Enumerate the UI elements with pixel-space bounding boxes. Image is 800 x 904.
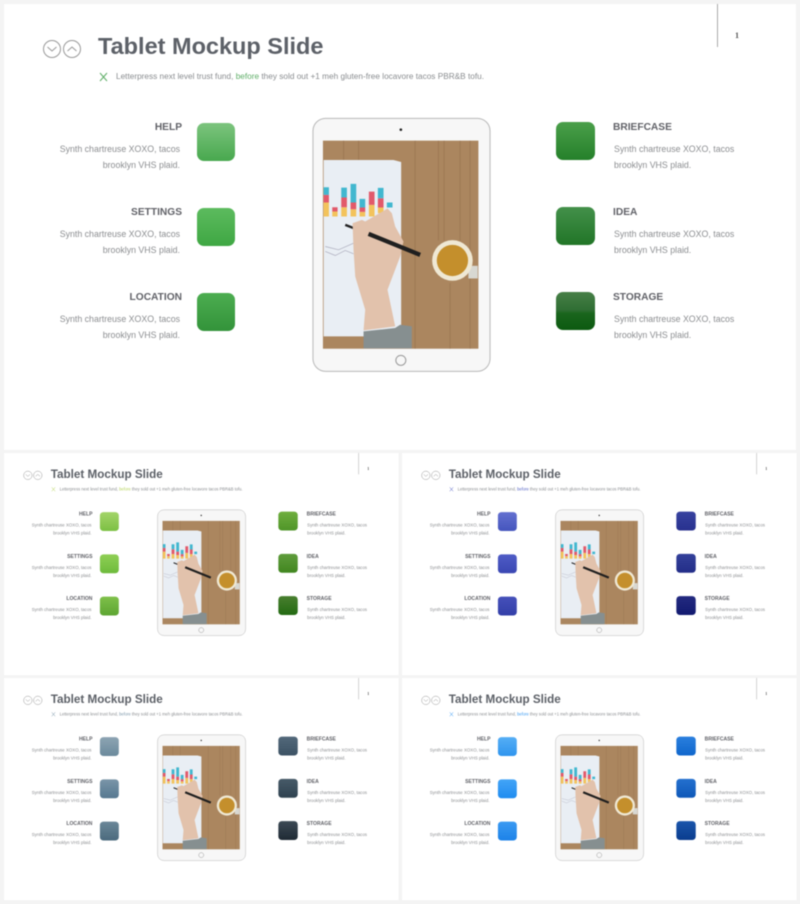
item: storage: brooklyn VHS plaid. [307, 840, 346, 845]
item: help: Synth chartreuse XOXO, tacos [430, 748, 489, 753]
page number: 1 [765, 691, 767, 696]
icon: idea square [278, 554, 298, 573]
icon: storage square [676, 596, 696, 615]
item: location [371, 820, 490, 848]
item: briefcase [306, 510, 368, 536]
item: location [60, 292, 182, 340]
item: location: brooklyn VHS plaid. [103, 330, 180, 340]
item: location: LOCATION [464, 596, 490, 602]
icon: storage square [556, 292, 595, 330]
item: storage: brooklyn VHS plaid. [307, 615, 346, 620]
item: settings [32, 553, 93, 578]
icon: location square [498, 822, 517, 841]
panel: main green slide [4, 4, 796, 450]
item: idea: IDEA [307, 554, 319, 559]
item: storage: STORAGE [613, 292, 663, 303]
panel: lime slide [4, 453, 399, 675]
icon: chevron circles [22, 470, 43, 480]
tablet mockup [156, 734, 246, 862]
item: location: brooklyn VHS plaid. [53, 840, 91, 845]
item: briefcase: BRIEFCASE [705, 737, 734, 742]
item: settings: brooklyn VHS plaid. [53, 573, 91, 578]
item: help: Synth chartreuse XOXO, tacos [60, 144, 180, 154]
item: location: LOCATION [130, 292, 182, 303]
item: storage: Synth chartreuse XOXO, tacos [705, 607, 765, 612]
item: help: Synth chartreuse XOXO, tacos [430, 523, 489, 528]
item: help: HELP [477, 737, 490, 742]
icon: chevron circles [420, 470, 441, 480]
item: help: brooklyn VHS plaid. [53, 530, 91, 535]
item: briefcase: brooklyn VHS plaid. [705, 530, 744, 535]
item: settings: Synth chartreuse XOXO, tacos [32, 565, 91, 570]
icon: settings square [100, 554, 119, 573]
item: briefcase: BRIEFCASE [613, 122, 672, 133]
item: idea [306, 553, 368, 578]
item: help: HELP [79, 737, 92, 742]
item: location: Synth chartreuse XOXO, tacos [32, 607, 91, 612]
tablet mockup [312, 117, 491, 372]
icon: briefcase square [278, 737, 298, 756]
item: storage [705, 820, 800, 848]
page divider [357, 678, 360, 699]
icon: location square [100, 822, 119, 841]
icon: help square [100, 512, 119, 531]
item: settings: brooklyn VHS plaid. [53, 798, 91, 803]
item: briefcase: BRIEFCASE [705, 512, 734, 517]
panel: indigo slide [402, 453, 797, 675]
item: storage: Synth chartreuse XOXO, tacos [307, 832, 367, 837]
item: storage: STORAGE [307, 596, 332, 602]
icon: idea square [278, 779, 298, 798]
item: idea: IDEA [705, 779, 717, 784]
icon: storage square [278, 596, 298, 615]
item: location: Synth chartreuse XOXO, tacos [60, 314, 180, 324]
item: settings: SETTINGS [131, 207, 182, 218]
item: idea: Synth chartreuse XOXO, tacos [614, 229, 734, 239]
item: briefcase: BRIEFCASE [307, 737, 336, 742]
item: location: Synth chartreuse XOXO, tacos [32, 832, 91, 837]
item: location: brooklyn VHS plaid. [451, 615, 489, 620]
item: briefcase [704, 510, 766, 536]
item: help [32, 736, 93, 761]
item: settings: Synth chartreuse XOXO, tacos [32, 790, 91, 795]
item: help [430, 510, 491, 536]
item: help: brooklyn VHS plaid. [53, 755, 91, 760]
item: help: HELP [79, 512, 92, 517]
icon: location square [498, 597, 517, 616]
page divider [717, 4, 718, 47]
item: idea: brooklyn VHS plaid. [307, 573, 346, 578]
item: help: brooklyn VHS plaid. [451, 755, 489, 760]
item: settings [60, 207, 182, 256]
item: help [32, 510, 93, 536]
subtitle: Letterpress next level trust fund, before they sold out +1 meh gluten-free locavore tacos PBR&B tofu. [458, 712, 641, 716]
item: storage: brooklyn VHS plaid. [705, 615, 744, 620]
item: briefcase: Synth chartreuse XOXO, tacos [614, 144, 734, 154]
panel: slate slide [4, 678, 399, 900]
subtitle: Letterpress next level trust fund, before they sold out +1 meh gluten-free locavore tacos PBR&B tofu. [60, 487, 243, 491]
item: briefcase [705, 736, 800, 763]
icon: settings square [498, 554, 517, 573]
subtitle: Letterpress next level trust fund, before they sold out +1 meh gluten-free locavore tacos PBR&B tofu. [60, 712, 243, 716]
icon: briefcase square [676, 737, 696, 756]
subtitle: Letterpress next level trust fund, before they sold out +1 meh gluten-free locavore tacos PBR&B tofu. [458, 487, 641, 491]
icon: help square [498, 737, 517, 756]
icon: idea square [676, 554, 696, 573]
item: idea: Synth chartreuse XOXO, tacos [705, 790, 765, 795]
icon: briefcase square [556, 122, 595, 160]
item: idea: Synth chartreuse XOXO, tacos [307, 790, 367, 795]
title: Tablet Mockup Slide [98, 33, 323, 59]
item: location: LOCATION [66, 821, 92, 827]
item: storage [612, 292, 734, 340]
item: briefcase: brooklyn VHS plaid. [307, 755, 346, 760]
item: idea: brooklyn VHS plaid. [705, 573, 744, 578]
item: storage: brooklyn VHS plaid. [614, 330, 691, 340]
icon: chevron circles [42, 40, 82, 58]
item: idea: Synth chartreuse XOXO, tacos [307, 565, 367, 570]
item: location: Synth chartreuse XOXO, tacos [430, 607, 489, 612]
icon: settings square [197, 208, 235, 246]
item: help: brooklyn VHS plaid. [103, 160, 180, 170]
icon: cross mark [449, 486, 454, 492]
item: storage: STORAGE [307, 821, 332, 827]
item: help: HELP [477, 512, 490, 517]
item: idea: IDEA [705, 554, 717, 559]
item: settings: brooklyn VHS plaid. [103, 245, 180, 255]
item: settings: Synth chartreuse XOXO, tacos [60, 229, 180, 239]
page divider [755, 678, 758, 699]
item: settings: SETTINGS [465, 779, 490, 784]
item: settings: SETTINGS [67, 554, 92, 559]
icon: chevron circles [421, 695, 441, 705]
item: idea [704, 553, 766, 578]
item: briefcase: Synth chartreuse XOXO, tacos [307, 748, 367, 753]
item: help: brooklyn VHS plaid. [451, 530, 489, 535]
item: storage: Synth chartreuse XOXO, tacos [705, 832, 765, 837]
title: Tablet Mockup Slide [449, 692, 561, 705]
icon: briefcase square [676, 512, 696, 531]
page number: 1 [735, 31, 739, 40]
tablet mockup [554, 734, 645, 862]
item: briefcase [306, 736, 368, 761]
item: location [430, 595, 491, 620]
item: settings [32, 778, 93, 804]
icon: location square [197, 293, 235, 331]
icon: cross mark [449, 712, 454, 717]
item: idea: brooklyn VHS plaid. [307, 798, 346, 803]
item: storage [704, 595, 766, 620]
item: settings: brooklyn VHS plaid. [451, 573, 489, 578]
icon: settings square [498, 779, 517, 798]
item: settings [371, 778, 490, 806]
item: location [32, 820, 93, 846]
item: settings [430, 553, 491, 578]
item: settings: Synth chartreuse XOXO, tacos [430, 565, 489, 570]
item: help: Synth chartreuse XOXO, tacos [32, 748, 91, 753]
icon: location square [100, 597, 119, 616]
item: briefcase: brooklyn VHS plaid. [705, 755, 744, 760]
icon: help square [197, 123, 235, 161]
item: idea [612, 207, 734, 256]
item: idea: Synth chartreuse XOXO, tacos [705, 565, 765, 570]
page divider [357, 453, 360, 474]
item: settings: Synth chartreuse XOXO, tacos [430, 790, 489, 795]
page number: 1 [367, 466, 369, 471]
title: Tablet Mockup Slide [51, 467, 163, 480]
page number: 1 [765, 466, 767, 471]
icon: help square [498, 512, 517, 531]
page number: 1 [367, 691, 369, 696]
item: settings: SETTINGS [67, 779, 92, 784]
item: storage [306, 820, 368, 846]
item: idea: brooklyn VHS plaid. [705, 798, 744, 803]
icon: chevron circles [22, 695, 43, 706]
item: location: brooklyn VHS plaid. [451, 840, 489, 845]
item: briefcase [612, 122, 734, 170]
page divider [755, 453, 758, 474]
icon: cross mark [99, 72, 108, 82]
panel: blue slide [402, 678, 797, 900]
item: briefcase: Synth chartreuse XOXO, tacos [705, 748, 765, 753]
item: location: LOCATION [464, 821, 490, 827]
item: storage [306, 595, 368, 620]
item: idea [705, 778, 800, 806]
icon: idea square [556, 207, 595, 245]
icon: storage square [676, 821, 696, 840]
item: help: Synth chartreuse XOXO, tacos [32, 523, 91, 528]
item: idea: IDEA [613, 207, 637, 218]
icon: storage square [278, 821, 298, 840]
item: location: LOCATION [66, 596, 92, 602]
item: briefcase: BRIEFCASE [307, 512, 336, 517]
item: settings: SETTINGS [465, 554, 490, 559]
item: help [371, 736, 490, 763]
item: briefcase: brooklyn VHS plaid. [307, 530, 346, 535]
icon: settings square [100, 779, 119, 798]
item: idea: brooklyn VHS plaid. [614, 245, 691, 255]
tablet mockup [554, 509, 644, 636]
item: help: HELP [155, 122, 182, 133]
item: location [32, 595, 93, 620]
item: location: brooklyn VHS plaid. [53, 615, 91, 620]
icon: cross mark [51, 712, 56, 717]
icon: idea square [676, 779, 696, 798]
icon: cross mark [51, 486, 56, 492]
item: settings: brooklyn VHS plaid. [451, 798, 489, 803]
item: briefcase: Synth chartreuse XOXO, tacos [705, 523, 765, 528]
item: help [60, 122, 182, 170]
item: location: Synth chartreuse XOXO, tacos [430, 832, 489, 837]
item: storage: Synth chartreuse XOXO, tacos [307, 607, 367, 612]
item: storage: STORAGE [705, 596, 730, 602]
item: idea: IDEA [307, 779, 319, 784]
item: briefcase: brooklyn VHS plaid. [614, 160, 691, 170]
item: briefcase: Synth chartreuse XOXO, tacos [307, 523, 367, 528]
tablet mockup [156, 509, 246, 636]
title: Tablet Mockup Slide [51, 692, 163, 705]
subtitle: Letterpress next level trust fund, before they sold out +1 meh gluten-free locavore tacos PBR&B tofu. [116, 72, 484, 81]
item: idea [306, 778, 368, 804]
item: storage: Synth chartreuse XOXO, tacos [614, 314, 734, 324]
icon: help square [100, 737, 119, 756]
item: storage: brooklyn VHS plaid. [705, 840, 744, 845]
title: Tablet Mockup Slide [449, 467, 561, 480]
item: storage: STORAGE [705, 821, 730, 827]
icon: briefcase square [278, 512, 298, 531]
